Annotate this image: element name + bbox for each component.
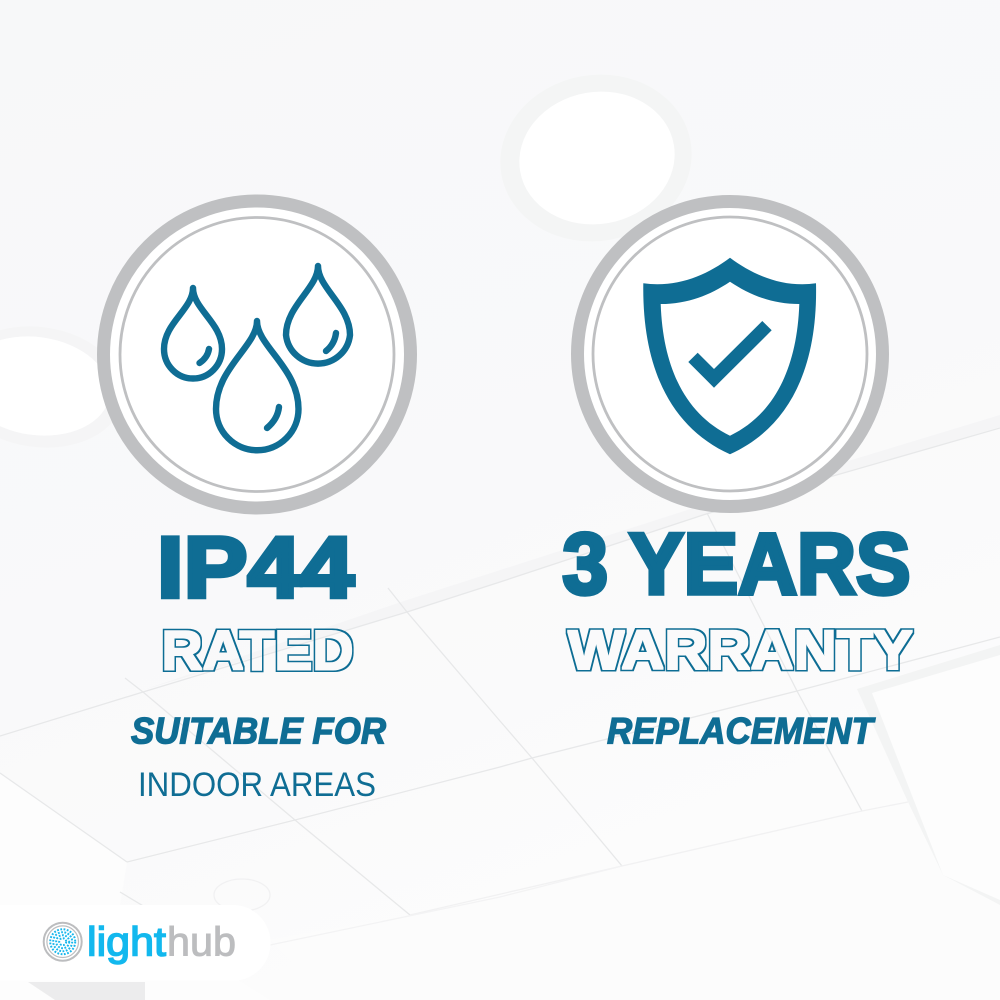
logo wordmark: lighthub: light (87, 919, 167, 965)
panel: IP44 badge circle (104, 201, 410, 508)
text: suitable for: SUITABLE FOR (131, 710, 386, 752)
text: indoor areas: INDOOR AREAS (138, 766, 376, 804)
icon: water drops (164, 266, 350, 450)
logo wordmark: lighthub: hub (167, 919, 236, 965)
panel: logo pill (0, 905, 271, 981)
heading: IP44: IP44 (157, 520, 354, 616)
icon: lighthub logo mark (44, 923, 82, 961)
panel: warranty badge circle (578, 202, 882, 506)
subheading: WARRANTY: WARRANTY (568, 618, 913, 681)
icon: shield with check mark (643, 258, 816, 454)
heading: 3 YEARS: 3 YEARS (562, 516, 910, 612)
text: replacement: REPLACEMENT (607, 710, 876, 752)
logo wordmark: lighthub (87, 919, 236, 965)
subheading: RATED: RATED (162, 618, 354, 682)
